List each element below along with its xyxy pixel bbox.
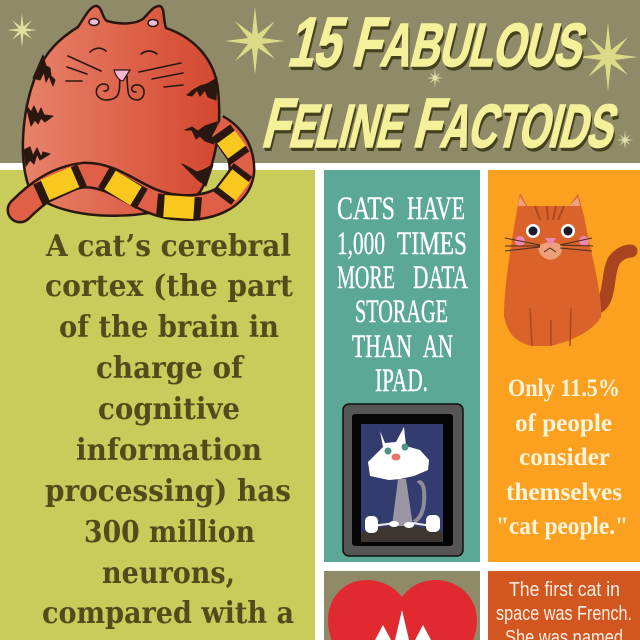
text: cerebral cortex fact: charge of	[96, 351, 245, 386]
tablet frame	[343, 404, 463, 556]
text: cerebral cortex fact: of the brain in	[59, 310, 279, 345]
text: data storage fact: CATS	[337, 191, 395, 227]
text: cat people fact	[496, 375, 628, 540]
cheeks	[515, 236, 525, 246]
cat body	[23, 6, 219, 216]
text: data storage fact: TIMES	[397, 226, 467, 262]
text: cat people fact: "cat people."	[496, 513, 628, 540]
icon: star top left	[7, 13, 37, 47]
text: data storage fact	[337, 191, 468, 399]
cat on screen	[368, 427, 429, 480]
cat tail fill	[20, 127, 242, 210]
cat tail outline	[20, 127, 242, 210]
text: data storage fact: HAVE	[407, 191, 465, 227]
text: cerebral cortex fact: information	[76, 433, 262, 468]
text: data storage fact: STORAGE	[355, 294, 448, 330]
text: data storage fact: AN	[423, 329, 453, 365]
text: space cat fact: The first cat in	[509, 579, 620, 601]
cat tail tip	[6, 196, 34, 224]
tail yellow bands	[45, 137, 241, 208]
text: cat people fact: of people	[515, 410, 612, 437]
text: cat people fact: Only 11.5%	[508, 375, 620, 402]
eyes	[526, 224, 575, 238]
forehead stripes	[535, 206, 564, 220]
panel: data storage background	[324, 170, 480, 562]
icon: sitting orange cat	[504, 193, 631, 346]
whiskers and mouth	[505, 238, 593, 252]
panel: cerebral cortex background	[0, 170, 315, 640]
header band	[0, 0, 640, 163]
icon: small star centre	[427, 68, 443, 88]
text: cerebral cortex fact: neurons,	[102, 556, 235, 591]
screen ground	[361, 526, 443, 542]
text: cerebral cortex fact: cognitive	[98, 392, 240, 427]
text: data storage fact: 1,000	[337, 226, 385, 262]
icon: tablet with cat	[343, 404, 463, 556]
cat ears	[89, 18, 158, 26]
text: cerebral cortex fact	[42, 229, 294, 631]
cat face	[66, 48, 183, 100]
text: data storage fact: THAN	[352, 329, 412, 365]
icon: star right of title	[578, 23, 638, 91]
icon: star left of title	[225, 7, 285, 75]
icon: red heart with heartbeat	[328, 580, 477, 640]
body	[504, 193, 601, 346]
tablet screen	[361, 424, 443, 542]
text: cerebral cortex fact: processing) has	[45, 474, 291, 509]
cat nose	[114, 70, 130, 81]
icon: small star bottom right	[617, 130, 633, 150]
tail	[598, 251, 631, 307]
text: space cat fact	[496, 579, 632, 640]
cat stripes	[24, 55, 217, 186]
text: data storage fact: DATA	[413, 260, 468, 296]
legs	[530, 308, 571, 346]
illustration: striped orange cat	[6, 6, 243, 224]
title line one: 15 FABULOUS	[283, 3, 593, 81]
text: data storage fact: IPAD.	[375, 363, 428, 399]
tail dark bands	[38, 131, 243, 209]
ears inner	[518, 196, 580, 206]
panel: cat people background	[488, 170, 640, 562]
text: cerebral cortex fact: 300 million	[84, 515, 255, 550]
text: cerebral cortex fact: cortex (the part	[45, 269, 293, 304]
text: cat people fact: consider	[519, 444, 610, 471]
text: cerebral cortex fact: compared with a	[42, 596, 294, 631]
muzzle	[538, 242, 562, 260]
title line two: FELINE FACTOIDS	[257, 84, 624, 162]
text: cerebral cortex fact: A cat’s cerebral	[45, 229, 291, 264]
panel: heart background	[324, 571, 480, 640]
text: cat people fact: themselves	[506, 479, 622, 506]
text: data storage fact: MORE	[337, 260, 395, 296]
panel: space cat background	[488, 571, 640, 640]
